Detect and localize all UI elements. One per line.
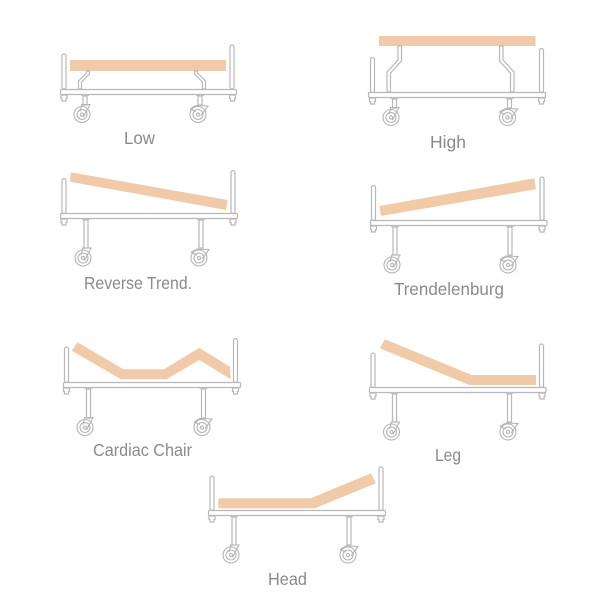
bed: High: [368, 36, 546, 152]
head post: [64, 347, 68, 382]
head post: [370, 58, 374, 92]
mattress: flat high: [379, 36, 536, 46]
wheel: left: [75, 248, 91, 266]
mattress: chair profile: [72, 342, 231, 379]
foot post: [230, 45, 234, 89]
bed: Leg: [370, 339, 546, 465]
frame bar: [368, 92, 546, 98]
lift arm: right: [500, 46, 514, 92]
head post: [371, 353, 375, 388]
leg: left: [84, 220, 88, 248]
frame bar: [60, 214, 238, 218]
bed: Trendelenburg: [370, 177, 547, 299]
frame bar: [64, 382, 240, 388]
bed: Low: [60, 45, 236, 148]
leg: left: [392, 99, 396, 108]
leg: right: [199, 220, 203, 248]
wheel: right: [500, 423, 518, 440]
frame bar: [370, 388, 546, 392]
head post: [62, 54, 66, 89]
head post: [372, 186, 376, 220]
wheel: right: [194, 418, 212, 436]
mattress: raised leg section: [380, 339, 536, 385]
wheel: left: [223, 545, 239, 563]
label: High: High: [430, 132, 466, 152]
head post: [210, 476, 214, 510]
mattress: tilted down to foot: [70, 172, 228, 210]
frame bar: [60, 90, 236, 94]
lift arm: right: [194, 71, 206, 89]
label: Low: Low: [124, 128, 155, 148]
foot post: [379, 467, 383, 510]
head post: [62, 178, 66, 214]
lift arm: left: [387, 46, 402, 92]
foot post: [231, 170, 235, 214]
label: Cardiac Chair: Cardiac Chair: [93, 440, 192, 460]
label: Head: Head: [268, 569, 307, 589]
leg: right: [508, 394, 512, 422]
wheel: right: [500, 108, 518, 126]
frame bar: [370, 220, 547, 226]
lift arm: left: [78, 71, 90, 89]
bed: Cardiac Chair: [64, 338, 240, 460]
wheel: left: [77, 418, 93, 436]
wheel: right: [500, 256, 518, 273]
label: Trendelenburg: Trendelenburg: [394, 279, 504, 299]
label: Reverse Trend.: Reverse Trend.: [84, 273, 192, 293]
leg: left: [83, 96, 87, 105]
mattress: raised head section: [218, 473, 376, 508]
leg: right: [508, 99, 512, 108]
leg: left: [393, 227, 397, 255]
foot post: [540, 344, 544, 388]
foot post: [540, 48, 544, 92]
wheel: left: [384, 422, 400, 440]
leg: right: [347, 517, 351, 545]
mattress: flat low: [70, 60, 226, 71]
leg: right: [508, 227, 512, 255]
frame bar: [208, 510, 386, 516]
wheel: right: [190, 106, 208, 122]
wheel: right: [340, 546, 358, 563]
leg: left: [86, 389, 90, 418]
wheel: left: [74, 104, 90, 122]
leg: left: [392, 394, 396, 422]
foot post: [540, 177, 544, 220]
foot post: [234, 338, 238, 382]
leg: right: [198, 96, 202, 105]
wheel: left: [384, 255, 400, 273]
leg: right: [202, 389, 206, 418]
wheel: left: [383, 108, 399, 126]
bed: Reverse Trend.: [60, 170, 238, 293]
leg: left: [232, 517, 236, 545]
mattress: tilted up to foot: [379, 178, 536, 216]
wheel: right: [191, 249, 209, 266]
bed: Head: [208, 467, 386, 589]
label: Leg: Leg: [435, 445, 461, 465]
